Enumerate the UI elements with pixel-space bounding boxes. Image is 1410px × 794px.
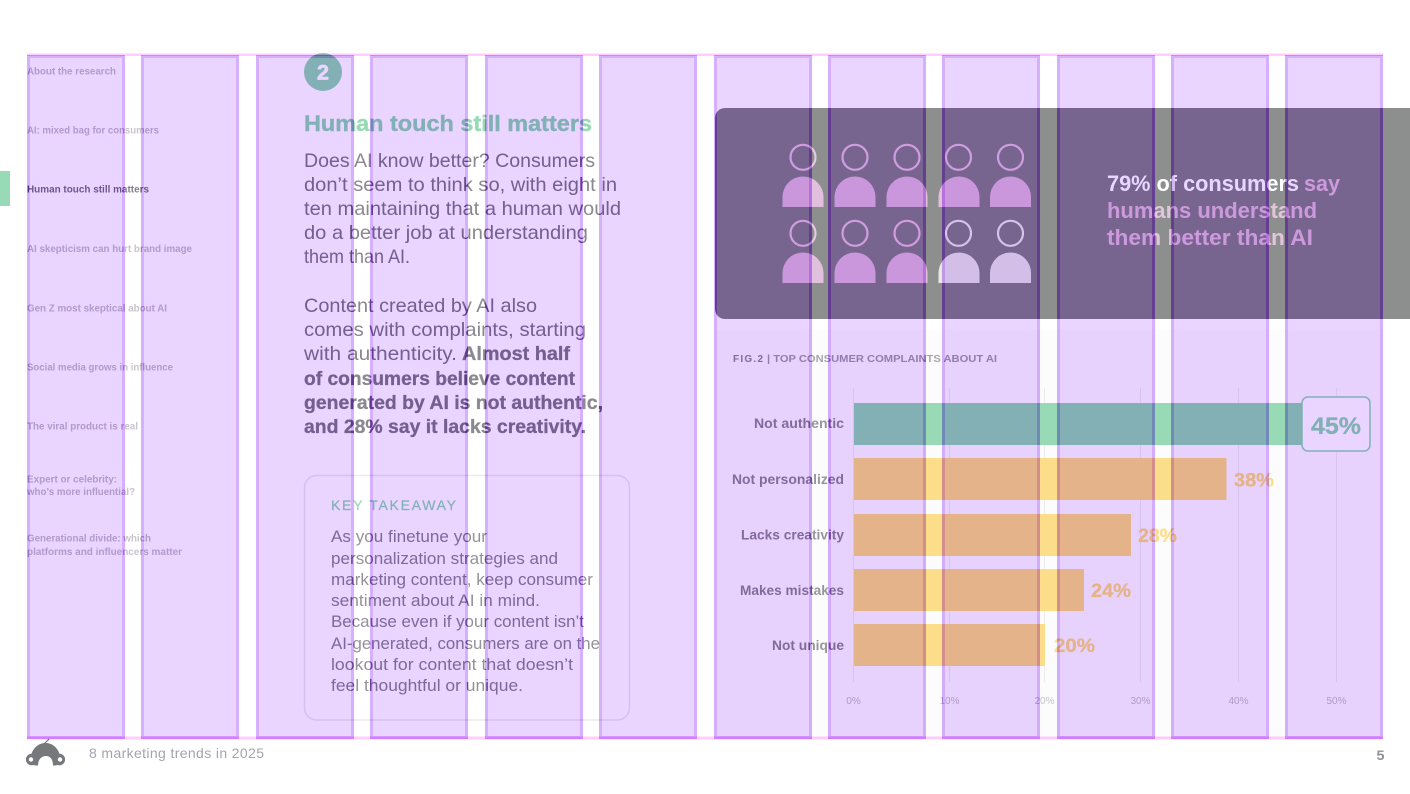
axis ticks: 0% [846,696,861,707]
active section marker [0,171,10,206]
paragraph one: Does AI know better? Consumers [304,150,595,172]
nav item: generational divide: platforms and influencers matter [27,546,182,558]
stat text: say [1304,171,1341,196]
stat text [1107,171,1341,250]
paragraph one: them than AI. [304,246,410,268]
category labels: Lacks creativity [741,528,844,542]
key takeaway heading: KEY TAKEAWAY [331,497,457,513]
stat panel [715,108,1410,319]
axis ticks: 20% [1034,696,1055,707]
key takeaway text: personalization strategies and [331,550,558,568]
category labels: Not personalized [732,472,844,487]
nav item: expert or celebrity: Expert or celebrity: [27,474,117,486]
paragraph one [304,150,621,268]
stat text: humans understand [1107,198,1317,223]
axis ticks [846,696,1347,707]
page number: 5 [1376,747,1385,763]
value labels: 38% [1234,470,1274,492]
paragraph two: Almost half [462,343,571,365]
paragraph two: comes with complaints, starting [304,319,586,341]
paragraph two: Content created by AI also [304,295,537,317]
value labels [1054,470,1274,657]
value labels: 24% [1091,581,1131,602]
paragraph one: ten maintaining that a human would [304,198,621,220]
chart title: FIG.2 [733,354,763,365]
footer logo [26,739,65,766]
nav item: expert or celebrity: who’s more influential? [26,486,135,498]
nav item: expert or celebrity [26,474,135,498]
people icons: 8 of 10 highlighted [782,145,1031,283]
axis ticks: 10% [939,696,960,707]
stat text: 79% of consumers [1107,171,1299,196]
key takeaway text [331,528,600,695]
axis ticks: 30% [1130,696,1151,707]
nav item: generational divide: Generational divide: which [27,532,151,544]
key takeaway text: feel thoughtful or unique. [331,677,523,695]
nav item: Gen Z: Gen Z most skeptical about AI [27,302,167,314]
body text block [303,150,621,438]
nav item: human touch active: Human touch still matters [27,184,149,196]
axis ticks: 40% [1228,696,1249,707]
key takeaway text: lookout for content that doesn’t [331,656,573,674]
chart title: | TOP CONSUMER COMPLAINTS ABOUT AI [767,354,997,365]
value labels: 20% [1054,636,1095,657]
paragraph two: and 28% say it lacks creativity. [304,416,586,438]
key takeaway text: sentiment about AI in mind. [331,592,540,610]
bars [854,403,1302,666]
key takeaway text: As you finetune your [331,528,488,546]
key takeaway text: AI-generated, consumers are on the [331,635,600,653]
heading: Human touch still matters [304,111,592,136]
footer text: 8 marketing trends in 2025 [89,745,264,761]
nav item: about the research: About the research [27,66,116,78]
nav item: AI mixed bag: AI: mixed bag for consumers [27,124,159,136]
nav item: generational divide [27,532,182,558]
nav item: social media: Social media grows in influence [27,362,173,374]
section number badge [304,53,342,91]
key takeaway text: Because even if your content isn’t [331,613,584,631]
navigation sidebar [0,66,192,558]
paragraph two: of consumers believe content [304,368,575,390]
45% callout: 45% [1311,413,1361,440]
category labels: Not unique [772,638,844,653]
key takeaway text: marketing content, keep consumer [331,571,594,589]
45% callout [1302,397,1370,451]
paragraph two: generated by AI is not authentic, [304,392,603,414]
value labels: 28% [1138,526,1177,547]
section number badge: 2 [317,60,329,84]
category labels: Not authentic [754,416,845,431]
category labels: Makes mistakes [740,583,844,598]
paragraph two: with authenticity. [303,343,457,365]
key takeaway card [304,476,630,720]
paragraph one: don’t seem to think so, with eight in [304,174,617,196]
bar chart: top consumer complaints [732,388,1370,707]
stat text: them better than AI [1107,225,1313,250]
category labels [732,416,845,653]
nav item: viral product: The viral product is real [27,420,138,432]
axis ticks: 50% [1326,696,1347,707]
paragraph one: do a better job at understanding [304,222,588,244]
paragraph two [303,295,603,438]
nav item: AI skepticism: AI skepticism can hurt brand image [27,243,192,255]
